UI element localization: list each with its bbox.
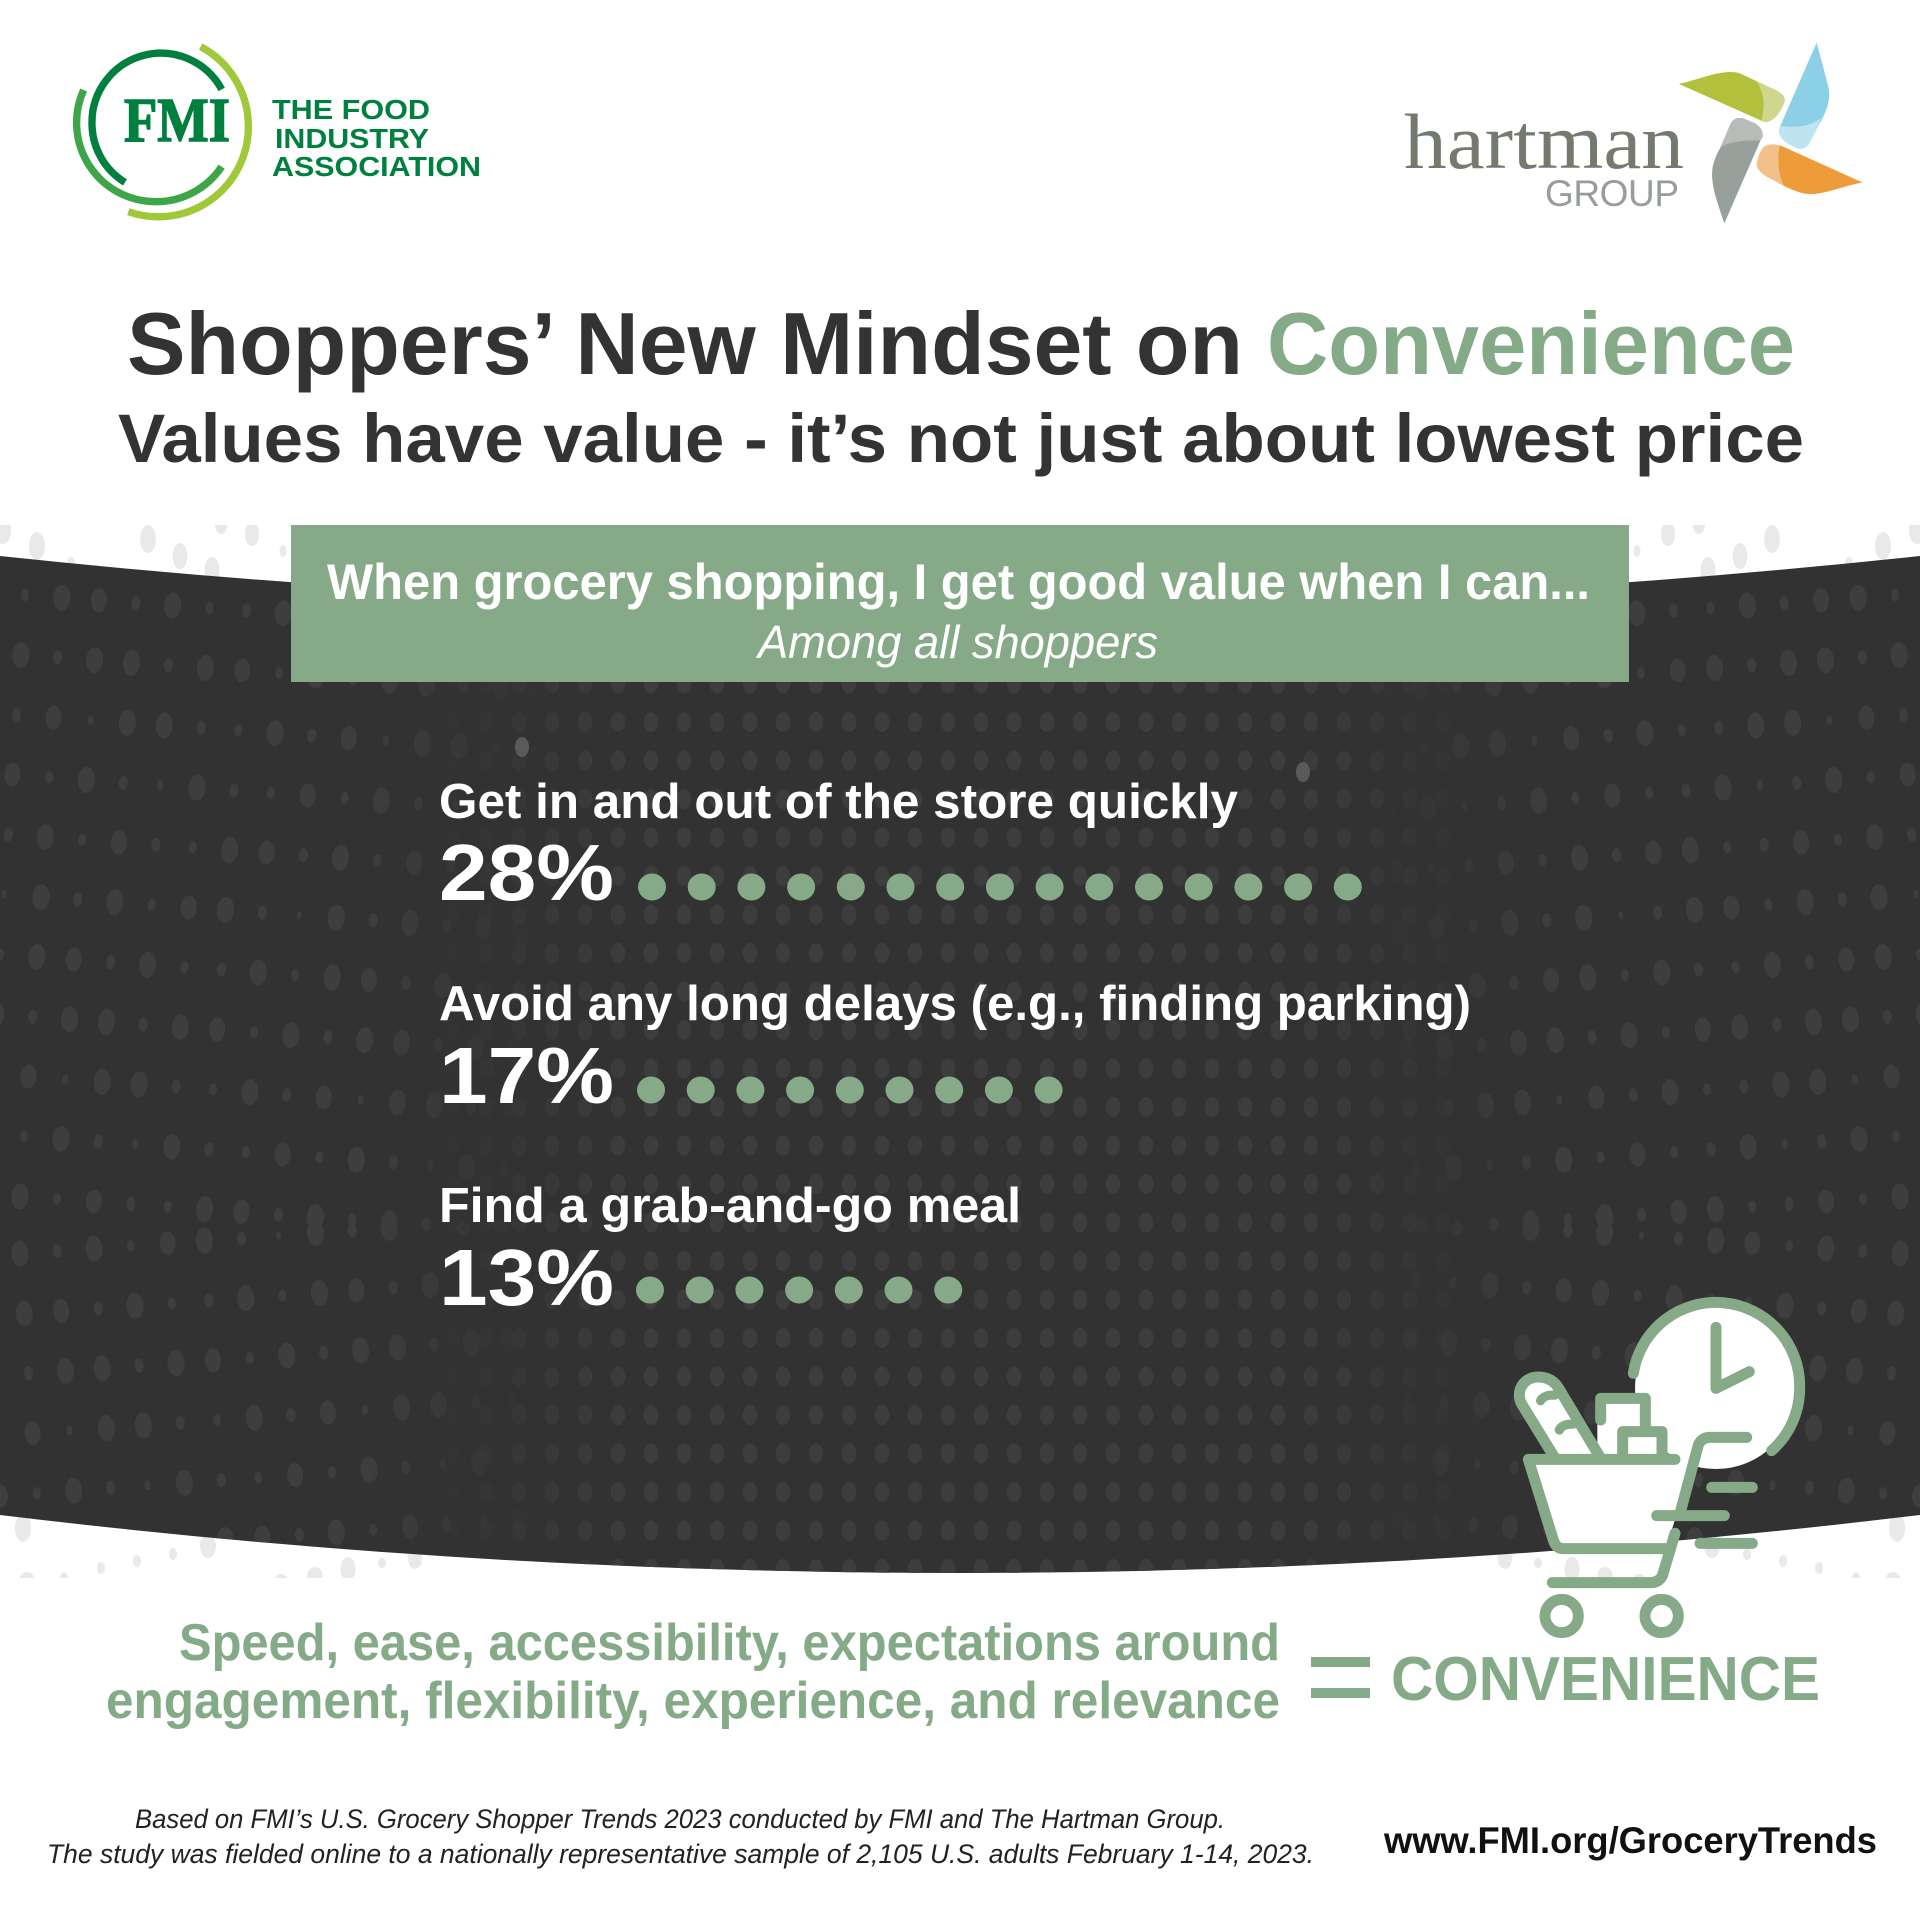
- stat: grab-and-go: [439, 1179, 1021, 1322]
- FMI logo: [77, 47, 481, 217]
- banner: When grocery shopping, I get good value when I can...: [327, 554, 1590, 610]
- website url: www.FMI.org/GroceryTrends: [1383, 1820, 1877, 1861]
- FMI logo: THE FOOD: [272, 94, 430, 125]
- stat: avoid delays: Avoid any long delays (e.g., finding parking): [439, 977, 1471, 1031]
- subtitle: Values have value - it’s not just about lowest price: [118, 400, 1804, 477]
- equals sign: [1311, 1657, 1370, 1698]
- Hartman Group logo: [1404, 37, 1867, 227]
- convenience word: CONVENIENCE: [1391, 1645, 1820, 1714]
- stat: get in and out: 28%: [439, 828, 614, 917]
- stat: avoid delays: [439, 977, 1471, 1120]
- stat: grab-and-go: 13%: [439, 1233, 614, 1322]
- stat: grab-and-go: Find a grab-and-go meal: [439, 1179, 1021, 1233]
- icon: shopping cart and clock: [1519, 1302, 1800, 1633]
- FMI logo: FMI: [124, 87, 230, 155]
- banner: [291, 525, 1629, 682]
- footnote: Based on FMI’s U.S. Grocery Shopper Trends 2023 conducted by FMI and The Hartman Group.: [135, 1804, 1225, 1834]
- convenience definition text: engagement, flexibility, experience, and relevance: [106, 1672, 1280, 1730]
- Hartman Group logo: GROUP: [1545, 173, 1679, 214]
- stat: get in and out: [439, 775, 1362, 917]
- Hartman Group logo: hartman: [1404, 98, 1684, 185]
- dark curved panel: [0, 556, 1920, 1638]
- footnote: [47, 1804, 1314, 1869]
- footnote: The study was fielded online to a nationally representative sample of 2,105 U.S. adults February 1-14, 2023.: [47, 1839, 1314, 1869]
- convenience definition text: Speed, ease, accessibility, expectations around: [179, 1614, 1280, 1672]
- title: Shoppers’ New Mindset on: [127, 294, 1243, 393]
- title: Convenience: [1267, 294, 1795, 393]
- title: [127, 294, 1795, 393]
- convenience definition text: [106, 1614, 1280, 1730]
- FMI logo: INDUSTRY: [275, 123, 429, 154]
- banner: Among all shoppers: [755, 616, 1158, 668]
- stat: get in and out: Get in and out of the store quickly: [439, 775, 1238, 829]
- stat: avoid delays: 17%: [439, 1031, 614, 1120]
- FMI logo: ASSOCIATION: [272, 151, 481, 182]
- white-strip dot texture: [0, 516, 1920, 1592]
